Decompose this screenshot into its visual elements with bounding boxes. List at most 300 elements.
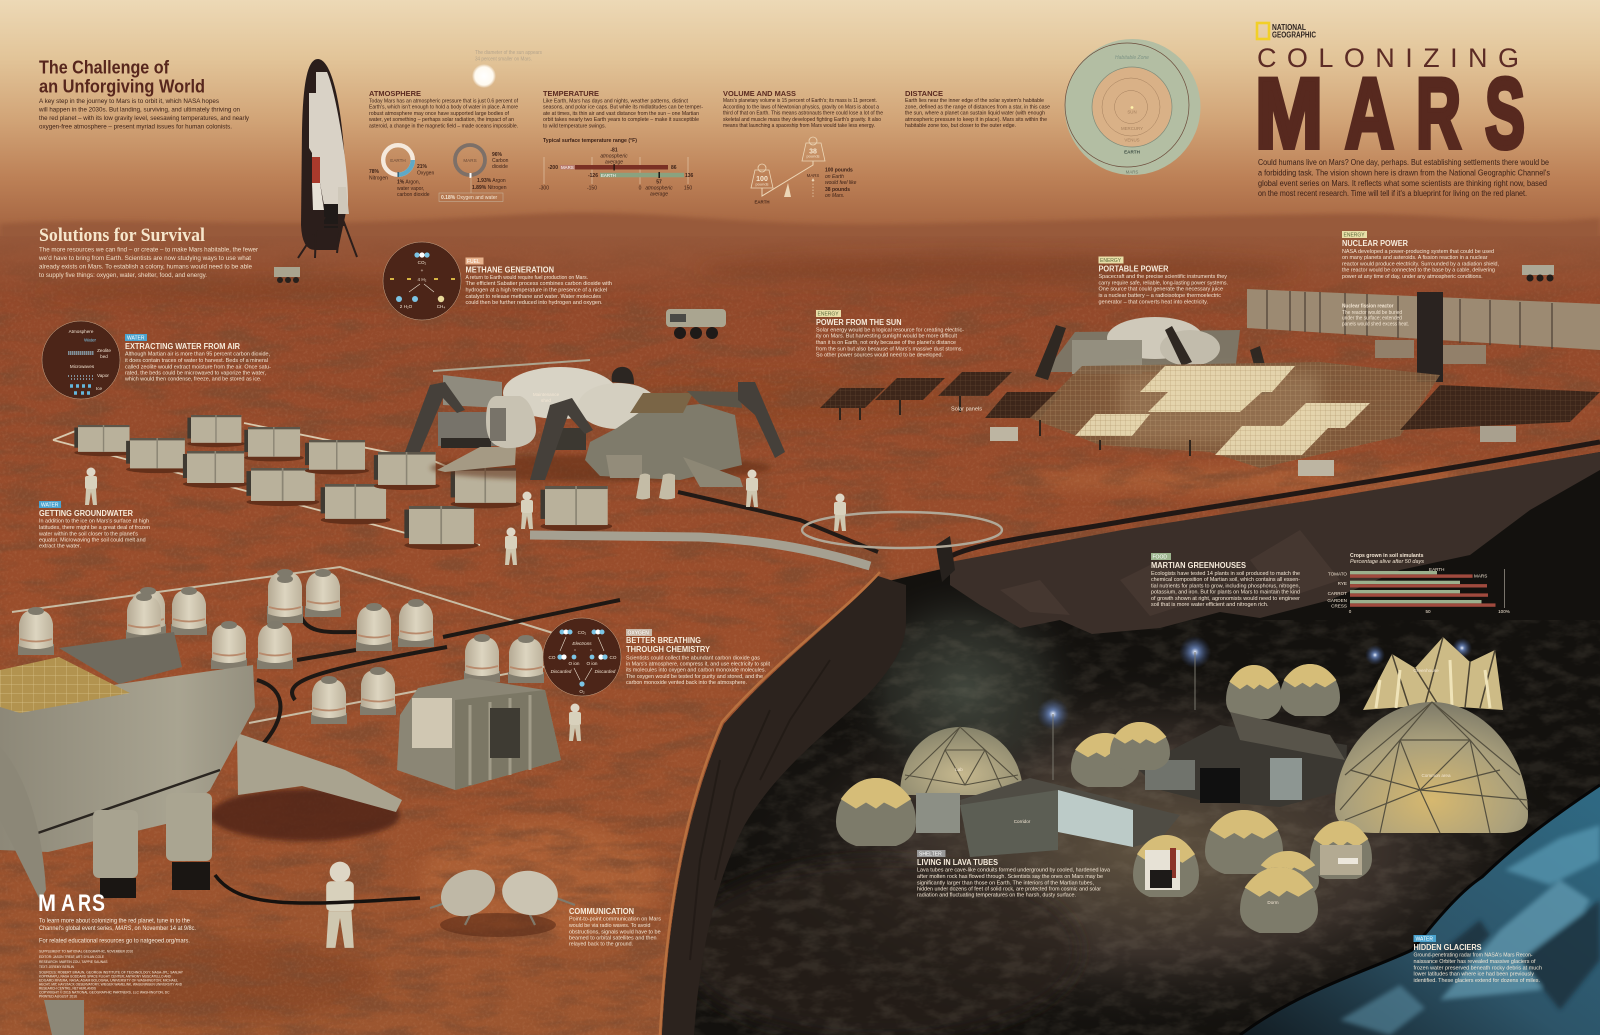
bar chart: crops grown in soil simulants: TOMATO [1328,572,1347,576]
tune-in text: Channel's global event series, MARS, on November 14 at 9/8c. [39,926,196,932]
temperature range chart: EARTH [601,173,616,178]
callout: hidden glaciers: HIDDEN GLACIERS [1414,943,1482,952]
callout: living in lava tubes: LIVING IN LAVA TUBES [917,858,998,867]
diagram: water from air circle [42,321,120,399]
temperature range chart: atmospheric [645,186,673,192]
section: atmosphere: robust atmosphere may once have supported large bodies of [369,111,509,117]
callout: methane generation: could then be further reduced into hydrogen and oxygen. [466,300,602,306]
interior pod left [1133,835,1199,897]
mars donut: dioxide [492,164,508,170]
callout: nuclear power: on many planets and asteroids. A fission reaction in a nuclear [1342,255,1488,261]
temperature range chart: average [650,192,668,198]
diagram: water from air circle: Water [84,338,97,342]
callout: martian greenhouses: tial nutrients for plants to grow, including phosphorus, nitrogen, [1151,584,1300,590]
temperature range chart: 136 [685,173,694,179]
callout: portable power: One source that could generate the necessary juice [1098,287,1223,293]
sun and caption: The diameter of the sun appears [475,50,542,56]
section: temperature: Typical surface temperature range (°F) [543,138,637,144]
section: volume and mass: VOLUME AND MASS [723,89,796,98]
central modules [1137,712,1347,807]
text: solutions intro [38,246,259,279]
credits: HECHT, MIT; HAYSTACK OBSERVATORY; WIEGER WAMELINK, WAGENINGEN UNIVERSITY AND [39,982,182,986]
ring bridge [802,512,1002,548]
cave ceiling rock [950,452,1600,634]
rover right [1522,265,1554,282]
bar chart: crops grown in soil simulants: 100% [1498,609,1510,614]
front pods [1071,733,1139,787]
callout: extracting water from air: called zeolite would extract moisture from the air. Once satu- [125,364,271,370]
callout: better breathing: carbon monoxide vented back into the atmosphere. [626,680,747,686]
section: distance: atmospheric pressure to keep it in place). Mars sits within the [905,117,1047,123]
dark power cable [678,492,878,552]
callout: hidden glaciers: WATER [1416,937,1433,943]
publisher logo [1257,23,1316,40]
weight scale: 38 [809,148,817,156]
callout: better breathing [626,629,770,686]
temperature range chart: MARS [561,165,574,170]
intro paragraph: on the most recent research. Time will tell if it's a blueprint for living on the red planet. [1258,188,1527,198]
habitat labels [955,668,1451,905]
callout: methane generation [466,258,612,306]
callout: communication: COMMUNICATION [569,907,634,916]
credits: SOURCES: ROBERT BRAUN, GEORGIA INSTITUTE OF TECHNOLOGY; NASA-JPL; SANJAY [39,970,184,974]
orbit diagram: MERCURY [1121,126,1143,131]
temperature range chart: 57 [656,180,662,186]
temperature range chart: 86 [671,165,677,171]
diagram: water from air circle: Vapor [97,373,109,378]
credits: COPYRIGHT © 2016 NATIONAL GEOGRAPHIC PARTNERS, LLC WASHINGTON, DC [39,990,170,994]
callout: getting groundwater: In addition to the ice on Mars's surface at high [39,519,149,525]
sun and caption [472,50,542,88]
callout: methane generation: catalyst to release methane and water. Water molecules [466,294,601,300]
orbit diagram [1064,39,1200,175]
callout: better breathing: in Mars's atmosphere, compress it, and use electricity to split [626,662,770,668]
martian ground [0,236,1600,1035]
callout: getting groundwater: GETTING GROUNDWATER [39,509,133,518]
label: nuclear fission reactor: Nuclear fission reactor [1342,304,1394,310]
callout: power from the sun [816,310,964,359]
diagram: water from air circle: Ice [96,386,103,391]
section: distance: the sun, where a planet can sustain liquid water (with enough [905,110,1045,116]
cliff-top edge light band [660,572,880,1035]
temperature range chart: average [605,160,623,166]
credits [39,950,184,998]
credits: SUPPLEMENT TO NATIONAL GEOGRAPHIC, NOVEMBER 2016 [39,950,133,954]
diagram: methane circle: 2 H₂O [400,304,413,309]
callout: power from the sun: ENERGY [818,312,839,318]
weight scale: pounds [755,182,769,186]
diagram: oxygen circle: CO [610,655,617,660]
bar chart: crops grown in soil simulants: 0 [1349,609,1352,614]
lava tube habitat [836,636,1528,933]
diagram: oxygen circle: O ion [569,661,580,666]
label: nuclear fission reactor: The reactor would be buried [1342,310,1402,316]
water extractor plant [53,415,612,550]
habitat labels: Lab [955,767,963,772]
section: atmosphere: Earth's, which isn't enough to hold a body of water in place. A more [369,104,518,110]
rover centre [666,309,726,339]
callout: power from the sun: ity on Mars. But harvesting sunlight would be more difficult [816,334,957,340]
weight scale: pounds [806,154,820,158]
diagram: methane circle: 4 H₂ [418,277,427,282]
callout: better breathing: its molecules into oxygen and carbon monoxide molecules. [626,668,766,674]
callout: nuclear power: reactor would produce electricity. Surrounded by a radiation shield, [1342,261,1499,267]
habitat labels: Corridor [1014,819,1031,824]
callout: extracting water from air: it does contain traces of water to harvest. Beds of a mineral [125,358,268,364]
callout: nuclear power: the reactor would be connected to the base by a cable, delivering [1342,268,1495,274]
callout: methane generation: FUEL [467,259,480,265]
diagram: water from air circle: Zeolite [97,348,111,353]
callout: living in lava tubes: significantly larger than those on Earth. The interiors of the Martian tubes, [917,880,1094,886]
callout: getting groundwater: equator. Microwaving the soil could melt and [39,538,146,544]
callout: extracting water from air: Although Martian air is more than 95 percent carbon dioxide, [125,352,270,358]
diagram: water from air circle: Microwaves [70,364,95,369]
temperature range chart: -126 [588,173,598,179]
heading: the challenge [39,56,205,96]
label: maintenance shed: Maintenance [533,392,560,397]
callout: hidden glaciers: lower latitudes than where ice had been previously [1414,972,1534,978]
callout: communication: Point-to-point communication on Mars [569,917,661,923]
earth donut: Oxygen [417,170,434,176]
bar chart: crops grown in soil simulants: CARROT [1328,591,1347,596]
series logo: R [78,890,91,917]
temperature range chart: atmospheric [600,154,628,160]
orbit diagram: SUN [1127,110,1137,114]
concrete shelter box [397,678,561,790]
section: temperature: TEMPERATURE [543,89,599,98]
callout: hidden glaciers: Ground-penetrating radar from NASA's Mars Recon- [1414,953,1533,959]
section: distance: zone, defined as the range of distances from a star, in this case [905,104,1050,110]
intro paragraph: global event series on Mars. It reflects what some scientists are thinking right now, based [1258,178,1547,188]
text: challenge intro [38,98,250,131]
callout: martian greenhouses: soil that is more water efficient and nitrogen rich. [1151,602,1268,608]
greenhouse [1363,637,1503,710]
section: distance [905,39,1200,175]
callout: getting groundwater: WATER [41,503,59,509]
callout: extracting water from air: EXTRACTING WATER FROM AIR [125,342,240,351]
lamp posts [1037,636,1472,780]
credits: EDGARD RIVERA, NASA; ADAM BOLOGNA, UNIVERSITY OF WASHINGTON; MICHAEL [39,978,178,982]
callout: martian greenhouses: potassium, and iron. But for plants on Mars to maintain the kind [1151,590,1300,596]
fog shaft [840,575,1090,805]
callout: living in lava tubes: radiation and fluctuating temperatures on the harsh, dusty surface. [917,893,1076,899]
common area dome [1335,702,1528,833]
callout: getting groundwater: extract the water. [39,544,81,550]
title: mars: R [1416,58,1461,168]
bar chart: crops grown in soil simulants: EARTH [1429,567,1444,572]
callout: communication [568,907,661,948]
callout: getting groundwater: water within the soil closer to the planet's [38,531,138,537]
weight scale: 100 pounds [825,168,853,174]
callout: portable power: PORTABLE POWER [1098,265,1169,274]
mars donut: MARS [463,158,477,163]
diagram: oxygen circle: CO₂ [578,630,587,635]
callout: methane generation: hydrogen at a high temperature in the presence of a nickel [466,287,607,293]
publisher logo: GEOGRAPHIC [1272,30,1316,40]
sun and caption: 34 percent smaller on Mars. [475,56,532,62]
callout: better breathing: The oxygen would be tested for purity and stored, and the [626,674,763,680]
section: temperature: to wild temperature swings. [543,123,606,129]
callout: better breathing: BETTER BREATHING [626,636,701,645]
intro paragraph: a forbidding task. The vision shown here is drawn from the National Geographic Channel's [1258,168,1550,178]
tune-in text [39,919,196,944]
callout: martian greenhouses: of growth shown at right, agronomists would need to engineer [1151,596,1300,602]
sky [0,0,1600,236]
series logo: A [61,890,75,917]
callout: methane generation: A return to Earth would require fuel production on Mars. [466,275,588,281]
callout: power from the sun: POWER FROM THE SUN [816,318,902,327]
weight scale: 38 pounds [825,187,850,193]
section: temperature [539,89,703,198]
credits: RESEARCH CENTRE, NETHERLANDS [39,986,97,990]
text: challenge intro: oxygen-free atmosphere – present myriad issues for human colonists. [39,124,232,131]
diagram: oxygen circle: Discarded [595,669,616,674]
title: mars [1255,58,1525,168]
section: distance: DISTANCE [905,89,943,98]
interior pod right [1310,821,1372,879]
diagram: methane circle: + [421,268,424,273]
rocket [298,59,357,258]
callout: nuclear power [1342,231,1499,280]
earth donut: Nitrogen [369,176,388,182]
label: nuclear fission reactor: under the surface; extended [1342,316,1402,322]
series logo: S [92,890,105,917]
callout: portable power: is a nuclear battery – a radioisotope thermoelectric [1098,293,1221,299]
earth donut: 78% [369,169,380,175]
bar chart: crops grown in soil simulants: CRESS [1331,604,1347,608]
series logo: M [38,890,56,917]
mars donut: 1.93% Argon [477,178,506,184]
diagram: methane circle [383,242,461,320]
callout: power from the sun: from the sun but also because of Mars's massive dust storms. [816,346,963,352]
callout: portable power [1098,256,1228,305]
credits: KOPPARAPU, NASA GODDARD SPACE FLIGHT CENTER; ANTHONY MUSCATELLO AND [39,974,171,978]
callout: nuclear power: ENERGY [1344,233,1365,239]
section: atmosphere: water, yet something – perhaps solar radiation, the impact of an [368,117,514,123]
heading: solutions for survival: Solutions for Survival [39,226,205,246]
mars donut: Carbon [492,158,509,164]
bar chart: crops grown in soil simulants: Crops grown in soil simulants [1350,553,1424,559]
label: nuclear fission reactor [1342,304,1409,327]
orbit diagram: EARTH [1124,150,1141,154]
callout: hidden glaciers: identified. These glaciers extend for dozens of miles. [1414,978,1540,984]
diagram: oxygen circle: O ion [587,661,598,666]
section: volume and mass: skeletal and muscle mass they developed fighting Earth's gravity. It also [723,117,881,123]
text: solutions intro: to supply five things: oxygen, water, shelter, food, and energy. [39,272,207,279]
title: colonizing: COLONIZING [1257,43,1519,73]
callout: hidden glaciers [1414,935,1542,984]
text: challenge intro: will happen in the 2030s. But landing, surviving, and ultimately thriving on [38,106,240,114]
callout: power from the sun: Solar energy would be a logical resource for creating electric- [816,327,964,333]
intro paragraph [1258,157,1550,198]
orbit diagram: VENUS [1124,138,1140,142]
habitat labels: Dorm [1267,900,1279,905]
callout: better breathing: Scientists could collect the abundant carbon dioxide gas [626,655,760,661]
label: nuclear fission reactor: panels would shed excess heat. [1342,321,1409,327]
section: atmosphere: Today Mars has an atmospheric pressure that is just 0.6 percent of [369,98,518,104]
solar panel field [820,362,1600,476]
large processing machine [0,632,420,1035]
text: solutions intro: The more resources we can find – or create – to make Mars habitable, the fewer [39,246,259,254]
callout: martian greenhouses: FOOD [1152,555,1167,561]
callout: portable power: Spacecraft and the precise scientific instruments they [1098,274,1227,280]
mars donut: 0.18% Oxygen and water [441,195,497,201]
callout: living in lava tubes [917,850,1110,899]
bar chart: crops grown in soil simulants: MARS [1474,574,1487,578]
text: solutions intro: already exists on Mars. To establish a colony, humans would need to be able [39,264,252,270]
weight scale [751,137,857,204]
section: atmosphere: ATMOSPHERE [369,89,421,98]
label: maintenance shed [533,392,560,403]
main pipeline [530,535,870,566]
label: maintenance shed: shed [541,398,551,403]
callout: methane generation: METHANE GENERATION [466,266,554,274]
weight scale: 100 [756,176,768,183]
weight scale: MARS [807,173,819,178]
bar chart: crops grown in soil simulants: 50 [1425,609,1431,614]
diagram: methane circle: CO₂ [418,260,427,265]
nuclear reactor radiator panels [1247,289,1600,382]
callout: living in lava tubes: Lava tubes are cave-like conduits formed underground by cooled, hardened lava [917,868,1110,874]
temperature range chart: 0 [639,186,642,192]
back domes [1226,665,1282,719]
corridor [916,778,1180,857]
habitat labels: Greenhouse [1413,668,1439,673]
callout: portable power: carry require safe, reliable, long-lasting power systems. [1098,280,1228,286]
temperature range chart: 150 [684,186,692,192]
intro paragraph: Could humans live on Mars? One day, perhaps. But establishing settlements there would be [1258,157,1549,167]
upper ground rim and cable [942,442,1600,562]
cliff wall [662,576,906,1035]
callout: martian greenhouses: Ecologists have tested 14 plants in soil produced to match the [1151,571,1300,577]
callout: communication: obstructions, signals would have to be [569,929,661,935]
credits: PRINTED AUGUST 2016 [39,994,77,998]
orbit diagram: MARS [1126,170,1138,174]
weight scale: would feel like [825,180,857,186]
diagram: methane circle: CH₄ [437,304,445,309]
callout: getting groundwater: latitudes, there might be a great deal of frozen [39,525,150,531]
mars donut [439,145,509,202]
section: volume and mass: means that launching a spaceship from Mars would take less energy. [723,123,875,129]
title: mars: M [1255,58,1323,168]
diagram: water from air circle: Atmosphere [69,329,94,334]
text: solutions intro: we'd have to bring from Earth. Scientists are now studying ways to use what [38,255,251,262]
section: distance: Earth lies near the inner edge of the solar system's habitable [905,98,1044,104]
callout: extracting water from air: which would then condense, freeze, and be stored as ice. [124,377,262,383]
diagram: oxygen circle [543,618,621,696]
temperature range chart: -300 [539,186,549,192]
bar chart: crops grown in soil simulants: RYE [1338,581,1347,586]
diagram: oxygen circle: O₂ [579,689,585,694]
credits: RESEARCH: MARTIN ZOU, TAPPIE SAUNAS [39,960,108,964]
callout: living in lava tubes: SHELTER [919,852,942,858]
communication dishes [430,861,575,937]
section: atmosphere [368,89,518,202]
earth donut [369,145,434,198]
heading: the challenge: an Unforgiving World [39,76,205,96]
orbit diagram: Habitable Zone [1115,55,1149,61]
fenced can farm [12,567,620,790]
diagram: oxygen circle: CO [549,655,556,660]
callout: communication: beamed to orbital satellites and then [569,936,656,942]
callout: hidden glaciers: frozen water preserved beneath rocky debris at much [1414,965,1542,971]
section: volume and mass: Mars's planetary volume is 15 percent of Earth's; its mass is 11 percent. [723,98,877,104]
callout: communication: would be via radio waves. To avoid [568,923,650,929]
publisher logo: NATIONAL [1272,23,1306,32]
cave interior [662,452,1600,1035]
callout: martian greenhouses: chemical composition of Martian soil, which contains all essen- [1151,577,1300,583]
lab dome [900,727,1023,795]
callout: methane generation: The efficient Sabatier process combines carbon dioxide with [466,281,612,287]
habitat labels: Common area [1421,773,1451,778]
section: temperature: orbit takes nearly two Earth years to complete – make it susceptible [543,117,699,123]
callout: better breathing: THROUGH CHEMISTRY [626,645,711,654]
temperature range chart: -150 [587,186,597,192]
callout: power from the sun: So other power sources would need to be developed. [816,353,943,359]
callout: extracting water from air: WATER [127,336,145,342]
callout: living in lava tubes: after molten rock has flowed through. Scientists say the ones on Mars may be [917,874,1103,880]
diagram: water from air circle: bed [100,354,108,359]
weight scale: on Mars. [825,193,844,199]
second dome base [1035,317,1272,395]
glacier [1240,785,1600,1035]
series logo [38,890,105,917]
temperature range chart: -200 [548,165,558,171]
callout: extracting water from air: rated, the beds could be microwaved to vaporize the water, [125,370,266,376]
title: mars: S [1485,58,1525,168]
rover near rocket [274,267,300,283]
callout: martian greenhouses: MARTIAN GREENHOUSES [1151,561,1246,570]
tune-in text: To learn more about colonizing the red planet, tune in to the [39,919,191,925]
section: atmosphere: asteroid, a change in the magnetic field – made oceans impossible. [369,123,518,129]
temperature range chart [539,148,694,198]
label: solar panels: Solar panels [951,407,982,413]
mars donut: 96% [492,152,503,158]
callout: better breathing: OXYGEN [628,631,649,637]
callout: hidden glaciers: naissance Orbiter has revealed massive glaciers of [1414,959,1536,965]
callout: power from the sun: than it is on Earth, not only because of the planet's distance [816,340,956,346]
callout: getting groundwater [38,501,150,550]
tune-in text: For related educational resources go to natgeoed.org/mars. [39,938,190,944]
section: volume and mass: third of that on Earth. This means astronauts there could lose a lot of the [723,110,883,116]
section: temperature: Like Earth, Mars has days and nights, weather patterns, distinct [543,98,688,104]
callout: extracting water from air [124,334,271,383]
earth donut: carbon dioxide [397,192,430,198]
astronauts on surface [85,468,846,948]
earth donut: water vapor, [397,186,424,192]
callout: portable power: ENERGY [1100,258,1122,264]
text: challenge intro: A key step in the journey to Mars is to orbit it, which NASA hopes [39,98,220,105]
weight scale: on Earth [825,174,844,180]
temperature range chart: -81 [610,148,618,154]
heading: the challenge: The Challenge of [39,56,170,78]
earth donut: EARTH [390,158,406,163]
title: mars: A [1345,58,1394,168]
section: volume and mass: According to the laws of Newtonian physics, gravity on Mars is about a [723,104,879,110]
shadow below machine [210,789,400,841]
section: distance: habitable zone too, but closer to the outer edge. [905,123,1016,129]
mars donut: 1.89% Nitrogen [472,185,507,191]
weight scale: EARTH [754,200,770,204]
cave floor [720,660,1580,1035]
callout: martian greenhouses [1151,553,1300,608]
bar chart: crops grown in soil simulants: Percentage alive after 50 days [1350,559,1424,565]
text: challenge intro: the red planet – with its low gravity level, seesawing temperatures, and nearly [39,115,250,122]
callout: portable power: generator – that converts heat into electricity. [1098,299,1208,305]
bar chart: crops grown in soil simulants [1327,553,1510,614]
credits: EDITOR: JASON TREAT; ART: DYLAN COLE [39,955,105,959]
section: volume and mass [723,89,883,204]
